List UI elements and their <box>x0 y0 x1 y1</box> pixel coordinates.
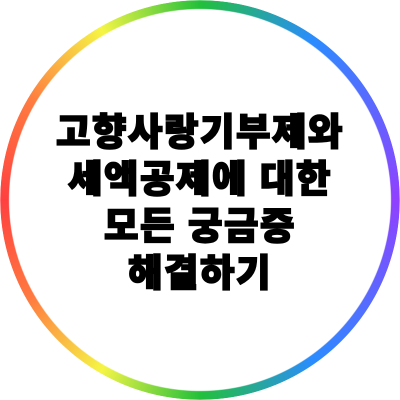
title: 고향사랑기부제와 <box>56 111 344 153</box>
title: 모든 궁금증 <box>104 205 296 247</box>
title <box>56 111 344 294</box>
title: 해결하기 <box>128 252 272 294</box>
title: 세액공제에 대한 <box>68 158 332 200</box>
